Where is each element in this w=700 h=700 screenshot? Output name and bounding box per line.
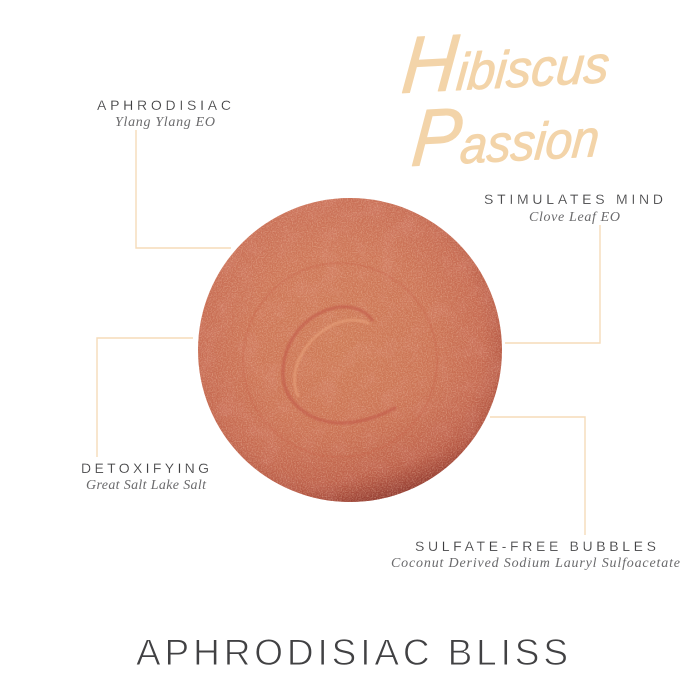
title: Hibiscus Passion [398,10,614,184]
callout line: stimulates mind [505,225,600,343]
label: aphrodisiac [97,97,231,130]
callout line: detoxifying [97,338,193,457]
title: Hibiscus Passion: Passion [408,84,604,184]
title: Hibiscus Passion: Hibiscus [398,10,614,111]
label: detoxifying: Great Salt Lake Salt [86,478,207,493]
label: detoxifying: DETOXIFYING [81,460,209,476]
label: sulfate-free bubbles [391,538,680,571]
label: detoxifying [81,460,209,493]
label: stimulates mind [484,191,663,225]
engraved ring [243,263,437,457]
callout line: sulfate-free bubbles [490,417,585,535]
label: sulfate-free bubbles: SULFATE-FREE BUBBLES [415,538,656,554]
engraved letter C highlight [294,320,368,396]
label: sulfate-free bubbles: Coconut Derived Sodium Lauryl Sulfoacetate [391,556,680,571]
engraved letter C [283,307,395,423]
label: aphrodisiac: Ylang Ylang EO [115,115,215,130]
label: stimulates mind: Clove Leaf EO [529,210,620,225]
label: stimulates mind: STIMULATES MIND [484,191,663,207]
label: aphrodisiac: APHRODISIAC [97,97,231,113]
bath bomb sphere [198,198,502,502]
tagline: aphrodisiac bliss: APHRODISIAC BLISS [136,632,568,673]
callout line: aphrodisiac [136,130,231,248]
